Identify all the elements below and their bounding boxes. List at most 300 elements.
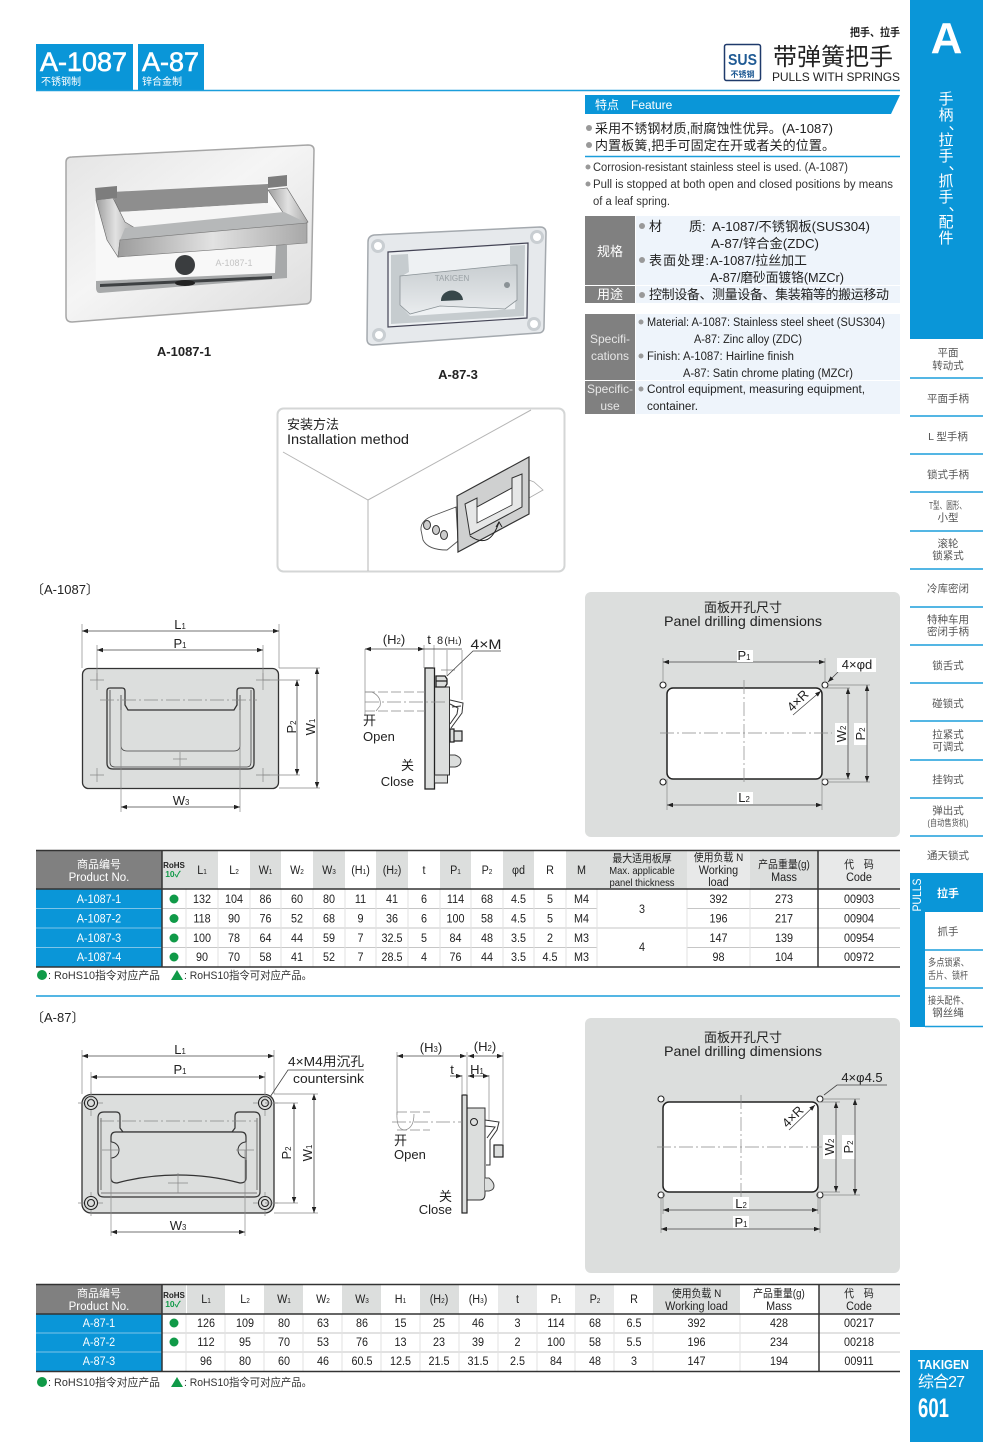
drawing: A-87 side view: Open bbox=[394, 1147, 426, 1162]
product number column: A-1087-3 bbox=[77, 933, 121, 945]
sidebar: pulls sub-tabs: PULLS bbox=[912, 878, 924, 912]
table header: Code bbox=[846, 872, 872, 884]
drawing: A-87 front view bbox=[78, 1042, 365, 1236]
row A-1087-1: M4 bbox=[574, 894, 590, 906]
table header: L2 bbox=[229, 865, 239, 877]
sidebar: category list: 密闭手柄 bbox=[927, 625, 969, 638]
row A-87-3: 2.5 bbox=[510, 1356, 525, 1368]
row A-1087-3: 3.5 bbox=[511, 933, 526, 945]
row A-1087-1: 11 bbox=[355, 894, 366, 906]
row A-87-1 bbox=[197, 1318, 874, 1330]
row A-87-3: 3 bbox=[631, 1356, 637, 1368]
row A-87-2: 95 bbox=[239, 1337, 251, 1349]
feature heading bar: 特点 bbox=[595, 97, 619, 112]
table header: W1 bbox=[277, 1294, 291, 1306]
sidebar: chapter tab: 、 bbox=[948, 116, 964, 133]
panel: specifications English: cations bbox=[591, 349, 629, 363]
row A-87-2: 196 bbox=[687, 1337, 706, 1349]
panel: A-1087 drilling dimensions: 面板开孔尺寸 bbox=[704, 600, 782, 615]
row A-1087-2 bbox=[193, 913, 875, 926]
row A-1087-4: 00972 bbox=[844, 952, 874, 964]
sidebar: category list: 平面手柄 bbox=[927, 392, 969, 405]
drawing: A-1087 side view: 关 bbox=[401, 758, 414, 773]
row A-1087-2: 118 bbox=[193, 913, 211, 926]
table: A-87 specifications bbox=[36, 1284, 900, 1372]
sidebar: category list: 碰锁式 bbox=[932, 697, 964, 710]
sidebar: category list bbox=[910, 347, 983, 862]
drawing: A-87 front view: P2 bbox=[279, 1146, 294, 1160]
drawing: A-1087 front view bbox=[82, 617, 320, 812]
sidebar: category list: 通天锁式 bbox=[927, 849, 969, 862]
sidebar: pulls sub-tabs: 接头配件、 bbox=[928, 994, 969, 1007]
category title: PULLS WITH SPRINGS bbox=[772, 70, 900, 84]
row A-87-1: 428 bbox=[770, 1318, 788, 1330]
sidebar: chapter tab: 、 bbox=[948, 156, 964, 173]
series heading: A-1087: 不锈钢制 bbox=[41, 75, 81, 88]
sidebar: chapter tab: 件 bbox=[938, 230, 954, 247]
sidebar: category list: 挂钩式 bbox=[932, 773, 964, 786]
photo: A-87-3 handle: TAKIGEN bbox=[435, 274, 469, 283]
table header bbox=[36, 1284, 900, 1314]
product number column: A-1087-1 bbox=[77, 894, 121, 906]
table header: φd bbox=[512, 865, 525, 877]
table header: (H1) bbox=[351, 865, 370, 877]
legend: RoHS notes for A-87: : RoHS10指令对应产品 bbox=[48, 1375, 160, 1389]
table header: (H3) bbox=[469, 1294, 487, 1306]
row A-1087-3: 32.5 bbox=[381, 933, 403, 945]
table header: RoHS bbox=[163, 1291, 186, 1300]
row A-87-2: 00218 bbox=[844, 1337, 874, 1349]
category title: 带弹簧把手 bbox=[773, 44, 893, 71]
row A-87-2: 112 bbox=[197, 1337, 215, 1349]
product number column: A-1087-4 bbox=[77, 952, 122, 964]
table header: L1 bbox=[201, 1294, 211, 1306]
panel: A-87 drilling dimensions: Panel drilling dimensions bbox=[664, 1043, 822, 1059]
panel: specifications Chinese: A-87/锌合金(ZDC) bbox=[711, 236, 819, 251]
table header: Working bbox=[699, 865, 738, 877]
row A-1087-4: 90 bbox=[196, 952, 208, 964]
table header: RoHS bbox=[163, 861, 186, 870]
product number column bbox=[36, 1314, 162, 1372]
table header: P1 bbox=[551, 1294, 562, 1306]
row A-87-2: 76 bbox=[356, 1337, 368, 1349]
row A-1087-1: 80 bbox=[323, 894, 335, 906]
sidebar: category list: 转动式 bbox=[932, 359, 964, 372]
table: A-1087 specifications bbox=[36, 850, 900, 967]
row A-87-3: 21.5 bbox=[428, 1356, 450, 1368]
RoHS markers bbox=[170, 1318, 178, 1346]
product number column bbox=[36, 889, 162, 967]
panel: A-1087 drilling dimensions bbox=[585, 592, 900, 837]
sidebar: category list: 拉紧式 bbox=[932, 728, 964, 741]
sidebar: pulls sub-tabs bbox=[910, 873, 983, 1027]
table header: 使用负载 N bbox=[672, 1286, 721, 1300]
drawing: A-87 front view: P1 bbox=[173, 1062, 187, 1077]
drawing: A-87 side view bbox=[392, 1039, 503, 1217]
product number column: A-87-3 bbox=[83, 1356, 115, 1368]
sidebar: chapter tab: 手 bbox=[938, 189, 954, 206]
row A-1087-4: M3 bbox=[574, 952, 589, 964]
table header: (H2) bbox=[383, 865, 401, 877]
merged panel thickness cells bbox=[639, 904, 646, 954]
RoHS markers bbox=[170, 894, 178, 962]
sidebar: category list: 冷库密闭 bbox=[927, 582, 969, 595]
row A-1087-2: 217 bbox=[775, 913, 793, 926]
sidebar: category list: 小型 bbox=[938, 511, 958, 524]
row A-1087-3: M3 bbox=[574, 933, 589, 945]
panel: specifications English: Specifi- bbox=[590, 332, 630, 346]
table header: t bbox=[423, 865, 426, 877]
sidebar: category list: 锁舌式 bbox=[932, 659, 964, 672]
row A-1087-4: 76 bbox=[449, 952, 462, 964]
caption: A-87-3: A-87-3 bbox=[438, 367, 478, 382]
row A-87-1: 00217 bbox=[844, 1318, 874, 1330]
drawing: A-1087 side view: 8 bbox=[437, 635, 443, 647]
product number column: A-87-1 bbox=[83, 1318, 115, 1330]
row A-87-1: 86 bbox=[356, 1318, 368, 1330]
table header: (H2) bbox=[430, 1294, 448, 1306]
table header: Max. applicable bbox=[609, 866, 675, 877]
feature list: Chinese: 采用不锈钢材质,耐腐蚀性优异。(A-1087) bbox=[595, 121, 833, 136]
row A-87-3: 48 bbox=[589, 1356, 601, 1368]
drawing: A-1087 side view: Open bbox=[363, 729, 395, 744]
table header: Product No. bbox=[69, 1301, 129, 1313]
panel: A-1087 drilling dimensions: W2 bbox=[834, 726, 849, 742]
table header: Mass bbox=[766, 1301, 792, 1313]
row A-1087-2: 52 bbox=[291, 913, 303, 926]
table header: 代 码 bbox=[844, 1288, 874, 1300]
sidebar: chapter tab bbox=[910, 0, 983, 339]
row A-1087-1: 60 bbox=[291, 894, 303, 906]
row A-87-1: 6.5 bbox=[626, 1318, 642, 1330]
row A-1087-4: 4.5 bbox=[542, 952, 558, 964]
table header: P1 bbox=[450, 865, 461, 877]
panel: A-87 drilling dimensions: 面板开孔尺寸 bbox=[704, 1030, 782, 1045]
sidebar: chapter tab: 配 bbox=[938, 214, 954, 231]
table header: L2 bbox=[240, 1294, 250, 1306]
series heading: A-1087 bbox=[36, 44, 133, 91]
row A-87-1: 46 bbox=[472, 1318, 484, 1330]
merged panel thickness cells: 4 bbox=[639, 942, 646, 954]
row A-1087-3: 44 bbox=[291, 933, 304, 945]
table header: L1 bbox=[197, 865, 207, 877]
table header: R bbox=[630, 1294, 638, 1306]
panel: A-87 drilling dimensions: 4×R bbox=[779, 1103, 807, 1131]
row A-1087-2: 4.5 bbox=[511, 913, 526, 926]
row A-1087-3: 78 bbox=[228, 933, 240, 945]
feature list: English: Corrosion-resistant stainless steel is used. (A-1087) bbox=[593, 162, 848, 174]
row A-1087-1: 273 bbox=[775, 894, 793, 906]
row A-1087-3: 00954 bbox=[844, 933, 875, 945]
row A-1087-2: 90 bbox=[228, 913, 240, 926]
row A-87-1: 114 bbox=[547, 1318, 565, 1330]
row A-1087-1: 68 bbox=[481, 894, 493, 906]
icon: SUS stainless steel badge bbox=[724, 44, 760, 80]
table header: Mass bbox=[771, 872, 797, 884]
row A-1087-1: 41 bbox=[386, 894, 398, 906]
panel: specifications English: use bbox=[600, 399, 620, 413]
drawing: A-1087 front view: W3 bbox=[173, 793, 189, 808]
panel: specifications Chinese: A-87/磨砂面镀铬(MZCr) bbox=[710, 270, 844, 285]
panel: A-87 drilling dimensions: 4×φ4.5 bbox=[841, 1070, 883, 1085]
panel: A-1087 drilling dimensions: P1 bbox=[737, 648, 751, 663]
row A-1087-4 bbox=[196, 952, 874, 964]
row A-87-2: 2 bbox=[514, 1337, 521, 1349]
row A-1087-4: 52 bbox=[323, 952, 335, 964]
row A-1087-3: 84 bbox=[450, 933, 462, 945]
row A-1087-4: 41 bbox=[291, 952, 303, 964]
table header: W3 bbox=[322, 865, 336, 877]
drawing: A-87 side view: Close bbox=[419, 1202, 452, 1217]
panel: installation method: Installation method bbox=[287, 431, 409, 447]
row A-1087-1 bbox=[193, 894, 874, 906]
row A-87-1: 3 bbox=[514, 1318, 521, 1330]
table header: Working load bbox=[665, 1301, 728, 1313]
table header: panel thickness bbox=[609, 878, 675, 889]
category title: 把手、拉手 bbox=[850, 25, 900, 39]
row A-1087-1: 4.5 bbox=[511, 894, 526, 906]
row A-1087-1: 132 bbox=[193, 894, 211, 906]
drawing: A-1087 side view: 开 bbox=[363, 713, 376, 728]
legend: RoHS notes for A-87: : RoHS10指令可对应产品。 bbox=[184, 1375, 312, 1389]
table header: 产品重量(g) bbox=[753, 1286, 805, 1300]
row A-87-2: 53 bbox=[317, 1337, 329, 1349]
table header: 使用负载 N bbox=[694, 850, 743, 864]
row A-1087-4: 4 bbox=[421, 952, 428, 964]
sidebar: category list: 锁紧式 bbox=[932, 549, 964, 562]
row A-87-3: 147 bbox=[687, 1356, 706, 1368]
row A-87-3: 31.5 bbox=[467, 1356, 489, 1368]
photo: A-87-3 handle bbox=[367, 227, 546, 345]
row A-87-1: 68 bbox=[589, 1318, 601, 1330]
row A-87-2: 100 bbox=[547, 1337, 565, 1349]
sidebar: category list: 弹出式 bbox=[932, 804, 964, 817]
row A-1087-2: 100 bbox=[446, 913, 465, 926]
row A-1087-4: 7 bbox=[357, 952, 364, 964]
panel: A-1087 drilling dimensions: 4×R bbox=[784, 687, 812, 715]
sidebar: category list: L 型手柄 bbox=[928, 430, 968, 443]
drawing: A-1087 side view: Close bbox=[381, 774, 414, 789]
drawing: A-87 side view: t bbox=[450, 1062, 454, 1077]
table header: Product No. bbox=[69, 872, 129, 884]
table header: 商品编号 bbox=[77, 1286, 121, 1300]
table header: P2 bbox=[482, 865, 493, 877]
table header: 10✓ bbox=[165, 869, 182, 879]
table header: Code bbox=[846, 1301, 872, 1313]
row A-1087-3: 100 bbox=[193, 933, 211, 945]
drawing: A-87 front view: W1 bbox=[300, 1145, 315, 1161]
drawing: A-1087 front view: W1 bbox=[303, 719, 318, 735]
feature heading bar: Feature bbox=[631, 98, 673, 112]
series heading: A-87: A-87 bbox=[142, 47, 199, 77]
series heading: A-1087: A-1087 bbox=[40, 47, 127, 77]
row A-1087-4: 28.5 bbox=[381, 952, 403, 964]
drawing: A-1087 front view: P1 bbox=[173, 636, 187, 651]
table header: H1 bbox=[395, 1294, 406, 1306]
panel: A-1087 drilling dimensions: P2 bbox=[853, 727, 868, 741]
table header: 10✓ bbox=[165, 1299, 182, 1309]
sidebar: pulls sub-tabs: 钢丝绳 bbox=[932, 1006, 964, 1019]
series heading: A-87 bbox=[138, 44, 204, 91]
drawing: A-1087 side view: (H1) bbox=[444, 636, 462, 647]
row A-1087-3: 48 bbox=[481, 933, 493, 945]
row A-87-2: 58 bbox=[589, 1337, 601, 1349]
row A-1087-2: 68 bbox=[323, 913, 335, 926]
page number block: TAKIGEN bbox=[918, 1358, 969, 1372]
sidebar: chapter tab: 、 bbox=[948, 197, 964, 214]
panel: specifications Chinese: 质: bbox=[689, 219, 706, 234]
product number column: A-1087-2 bbox=[77, 913, 121, 926]
sidebar: category list: 锁式手柄 bbox=[927, 468, 969, 481]
table header: M bbox=[577, 865, 586, 877]
row A-1087-1: 00903 bbox=[844, 894, 874, 906]
sidebar: category list: 滚轮 bbox=[938, 537, 959, 550]
row A-87-1: 126 bbox=[197, 1318, 215, 1330]
panel: specifications Chinese: A-1087/拉丝加工 bbox=[710, 253, 807, 268]
sidebar: category list: 平面 bbox=[938, 347, 958, 359]
drawing: A-1087 front view: P2 bbox=[284, 720, 299, 734]
drawing: A-87 side view: (H2) bbox=[474, 1039, 496, 1054]
table header: t bbox=[516, 1294, 520, 1306]
row A-1087-2: M4 bbox=[574, 913, 590, 926]
icon: SUS stainless steel badge: SUS bbox=[728, 52, 757, 69]
row A-1087-2: 58 bbox=[481, 913, 493, 926]
series heading: A-87: 锌合金制 bbox=[142, 75, 182, 88]
table header: W2 bbox=[290, 865, 304, 877]
row A-1087-3: 2 bbox=[547, 933, 553, 945]
sidebar: pulls sub-tabs: 拉手 bbox=[937, 886, 959, 900]
legend: RoHS notes for A-1087 bbox=[37, 968, 312, 982]
panel: installation method bbox=[278, 408, 564, 572]
sidebar: pulls sub-tabs: 舌片、锁杆 bbox=[928, 969, 968, 982]
panel: A-1087 drilling dimensions: L2 bbox=[738, 790, 750, 805]
callout: countersink: 4×M4用沉孔 bbox=[288, 1054, 364, 1069]
row A-87-3 bbox=[200, 1356, 874, 1368]
feature list: English bbox=[586, 162, 893, 208]
table header: 最大适用板厚 bbox=[612, 851, 672, 865]
table header: W1 bbox=[259, 865, 273, 877]
row A-87-2 bbox=[197, 1337, 874, 1349]
feature list: Chinese bbox=[586, 121, 835, 153]
sidebar: pulls sub-tabs: 多点锁紧、 bbox=[928, 956, 969, 969]
panel: specifications English: container. bbox=[647, 401, 698, 413]
drawing: A-87 front view: L1 bbox=[174, 1042, 186, 1057]
table header: 代 码 bbox=[844, 859, 874, 871]
row A-87-3: 80 bbox=[239, 1356, 251, 1368]
panel: specifications English bbox=[585, 314, 900, 414]
drawing: A-1087 side view bbox=[363, 632, 502, 789]
drawing: A-87 side view: (H3) bbox=[420, 1040, 442, 1055]
table header: P2 bbox=[590, 1294, 601, 1306]
row A-1087-3: 64 bbox=[260, 933, 272, 945]
row A-1087-1: 5 bbox=[547, 894, 553, 906]
table header: 产品重量(g) bbox=[758, 857, 810, 871]
page number block bbox=[910, 1350, 983, 1442]
sidebar: category list: 特种车用 bbox=[927, 613, 969, 626]
drawing: A-87 side view: H1 bbox=[470, 1062, 484, 1077]
row A-87-2: 5.5 bbox=[626, 1337, 642, 1349]
row A-87-3: 60 bbox=[278, 1356, 290, 1368]
row A-1087-4: 104 bbox=[775, 952, 794, 964]
row A-87-1: 63 bbox=[317, 1318, 329, 1330]
legend: RoHS notes for A-1087: : RoHS10指令可对应产品。 bbox=[184, 968, 312, 982]
drawing: A-87 side view: 关 bbox=[439, 1189, 452, 1204]
row A-1087-2: 196 bbox=[709, 913, 728, 926]
row A-87-3: 194 bbox=[770, 1356, 789, 1368]
feature heading bar bbox=[585, 95, 900, 114]
table header: load bbox=[708, 877, 729, 889]
sidebar: chapter tab: 手 bbox=[938, 91, 954, 108]
drawing: A-1087 front view: L1 bbox=[174, 617, 186, 632]
row A-1087-4: 58 bbox=[259, 952, 272, 964]
row A-87-1: 15 bbox=[394, 1318, 407, 1330]
panel: specifications Chinese: A-1087/不锈钢板(SUS304) bbox=[712, 219, 870, 234]
table header: W3 bbox=[355, 1294, 369, 1306]
row A-87-1: 80 bbox=[278, 1318, 290, 1330]
illustration: mounted handle bbox=[421, 457, 543, 552]
panel: A-87 drilling dimensions: L2 bbox=[735, 1196, 747, 1211]
row A-1087-1: 6 bbox=[421, 894, 427, 906]
callout: countersink bbox=[270, 1054, 365, 1097]
merged panel thickness cells: 3 bbox=[639, 904, 645, 916]
panel: specifications English: Finish: A-1087: Hairline finish bbox=[647, 351, 794, 363]
row A-1087-2: 36 bbox=[386, 913, 398, 926]
sidebar: chapter tab: 手 bbox=[938, 148, 954, 165]
section label: A-1087: 〔A-1087〕 bbox=[31, 582, 99, 597]
row A-1087-3: 59 bbox=[323, 933, 335, 945]
row A-87-1: 25 bbox=[433, 1318, 445, 1330]
panel: specifications Chinese: 用途 bbox=[597, 287, 623, 302]
sidebar: chapter tab: A bbox=[931, 14, 962, 63]
row A-1087-3: 147 bbox=[709, 933, 728, 945]
panel: installation method: 安装方法 bbox=[287, 417, 339, 432]
sidebar: category list: 可调式 bbox=[932, 740, 964, 753]
row A-87-3: 60.5 bbox=[351, 1356, 373, 1368]
row A-87-2: 70 bbox=[278, 1337, 290, 1349]
feature list: English: Pull is stopped at both open and closed positions by means bbox=[593, 179, 893, 191]
callout: countersink: countersink bbox=[293, 1071, 365, 1086]
icon: SUS stainless steel badge: 不锈钢 bbox=[730, 69, 754, 79]
row A-1087-4: 98 bbox=[712, 952, 725, 964]
panel: A-1087 drilling dimensions: Panel drilling dimensions bbox=[664, 613, 822, 629]
panel: A-1087 drilling dimensions: 4×φd bbox=[842, 657, 872, 672]
row A-87-3: 12.5 bbox=[390, 1356, 411, 1368]
row A-1087-2: 9 bbox=[357, 913, 364, 926]
legend: RoHS notes for A-87 bbox=[37, 1375, 312, 1389]
photo: A-1087-1 handle bbox=[66, 145, 314, 322]
row A-1087-3 bbox=[193, 933, 875, 945]
row A-1087-4: 44 bbox=[481, 952, 494, 964]
row A-87-2: 13 bbox=[394, 1337, 407, 1349]
drawing: A-1087 side view: 4×M bbox=[470, 636, 502, 652]
row A-1087-2: 00904 bbox=[844, 913, 875, 926]
row A-87-3: 00911 bbox=[844, 1356, 874, 1368]
table header: W2 bbox=[316, 1294, 330, 1306]
panel: specifications English: Control equipment, measuring equipment, bbox=[647, 384, 865, 396]
row A-1087-1: 392 bbox=[709, 894, 728, 906]
sidebar: chapter tab: 柄 bbox=[938, 107, 954, 124]
drawing: A-1087 side view: (H2) bbox=[383, 632, 405, 647]
row A-1087-1: 114 bbox=[447, 894, 465, 906]
table header: 商品编号 bbox=[77, 857, 121, 871]
row A-1087-3: 5 bbox=[421, 933, 427, 945]
feature list: Chinese: 内置板簧,把手可固定在开或者关的位置。 bbox=[595, 138, 835, 153]
row A-1087-4: 70 bbox=[228, 952, 240, 964]
row A-87-1: 392 bbox=[687, 1318, 706, 1330]
table header bbox=[36, 850, 900, 889]
panel: A-87 drilling dimensions: W2 bbox=[822, 1139, 837, 1155]
panel: specifications English: Specific- bbox=[587, 382, 633, 396]
